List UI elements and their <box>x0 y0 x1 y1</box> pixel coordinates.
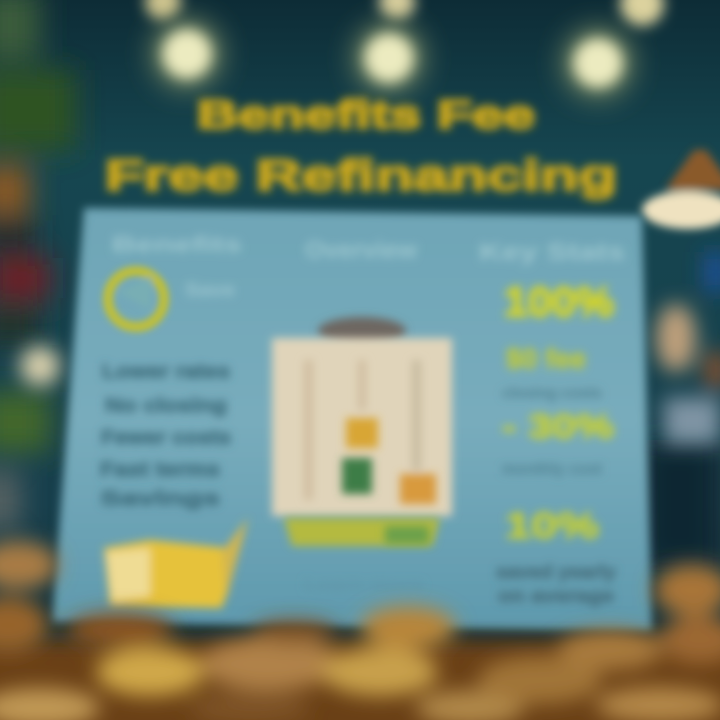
left column text lines: Fewer costs <box>101 427 231 449</box>
right column statistics: - 30% <box>502 408 614 446</box>
title <box>105 93 617 200</box>
left column heading: Save <box>185 280 235 300</box>
building body <box>272 338 452 516</box>
title: Benefits Fee <box>197 93 535 137</box>
right hanging lamp <box>642 150 720 229</box>
left globe light <box>20 346 60 386</box>
right column statistics: monthly cost <box>502 461 603 478</box>
left column text lines: Savings <box>100 488 220 510</box>
right column statistics: 100% <box>504 278 614 325</box>
left column text lines: No closing <box>105 395 227 417</box>
icon: yellow circular arrows <box>108 271 164 327</box>
left column text lines: Lower rates <box>102 361 230 383</box>
poster panel <box>52 208 652 632</box>
green and yellow base <box>284 518 440 546</box>
right column statistics: $0 fee <box>506 343 586 374</box>
left foliage and shelves <box>0 0 75 530</box>
centre column heading: Overview <box>305 237 417 264</box>
right column statistics: 10% <box>505 505 599 546</box>
right column heading: Key Stats <box>479 239 625 266</box>
centre building illustration <box>272 317 452 546</box>
title: Free Refinancing <box>105 151 617 200</box>
left column heading <box>112 232 242 300</box>
yellow folder chart <box>104 518 248 608</box>
centre footer text: Learn more <box>304 577 424 594</box>
right column statistics: saved yearly <box>496 562 616 582</box>
building roof <box>318 317 406 345</box>
left column text lines: Fast terms <box>100 459 220 481</box>
ceiling lights <box>145 0 664 97</box>
building columns <box>304 360 436 504</box>
left column text lines <box>100 361 231 510</box>
foreground coins <box>0 541 720 720</box>
left column heading: Benefits <box>112 232 242 257</box>
right column statistics: closing costs <box>502 385 602 402</box>
right column statistics <box>496 278 616 606</box>
right column statistics: on average <box>498 586 614 606</box>
right background figure <box>656 252 720 444</box>
